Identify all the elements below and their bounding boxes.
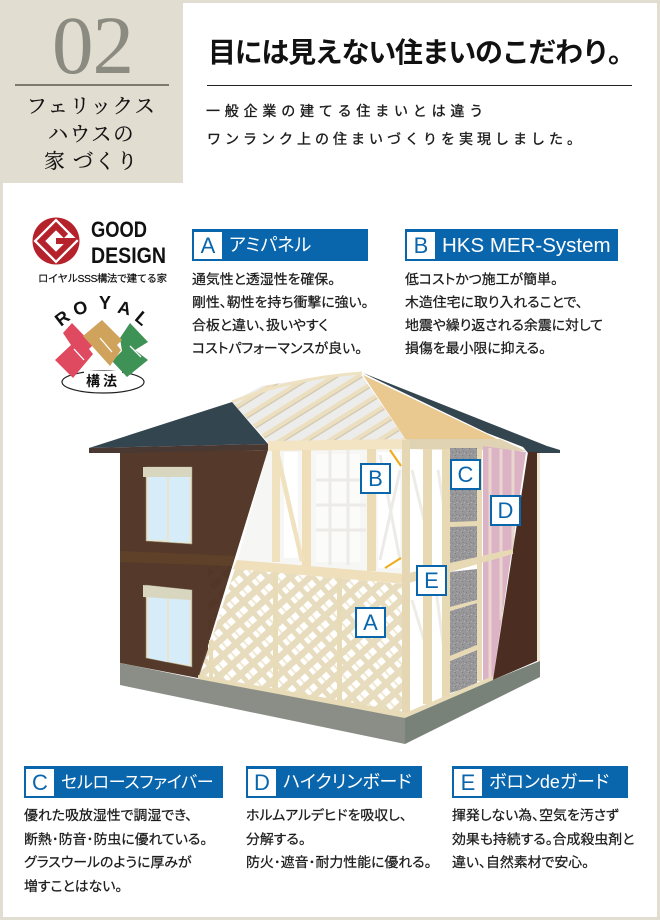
description D: 防火･遮音･耐力性能に優れる。 [246,854,432,870]
description C: 優れた吸放湿性で調湿でき、 [24,807,192,823]
icon: good design mark [32,218,80,264]
gray insulation [450,448,477,693]
interior ghost frame [237,449,450,715]
description D: 分解する。 [246,830,306,846]
label bar B: B [414,233,428,258]
right frame [405,449,513,704]
upper beam [268,439,406,451]
marker D: D [498,498,513,523]
description C: 断熱･防音･防虫に優れている。 [24,830,207,846]
royal arc letters [51,293,152,330]
upper window [143,467,192,544]
description D [246,807,432,870]
pink board [483,446,526,680]
royal arc letters: Y [99,293,111,313]
chart: house cutaway illustration [89,372,560,744]
marker A [355,607,386,638]
description E: 効果も持続する。合成殺虫剤と [452,830,634,846]
marker E [416,565,447,596]
label bar E: ボロンdeガード [489,772,609,792]
panel: D [246,766,432,870]
marker A: A [363,610,378,635]
royal oval [62,371,144,393]
caption: ロイヤルSSS構法で建てる家 [38,272,167,285]
right wall [493,452,540,680]
panel: A [192,229,369,356]
description A: 合板と違い、扱いやすく [192,317,328,333]
lower posts [198,440,493,718]
royal arc letters: A [116,297,133,319]
roof sheathing [363,375,500,441]
lattice panel [199,569,403,712]
label bar A: A [201,233,215,258]
description A: 通気性と透湿性を確保。 [192,271,335,287]
description E: 違い、自然素材で安心。 [452,854,589,870]
panel: section header block [0,0,183,183]
description B: 損傷を最小限に抑える。 [405,340,546,356]
section title: ハウスの [48,124,135,146]
marker B: B [368,466,383,491]
SSS emblem [55,320,148,378]
description C: グラスウールのように厚みが [24,854,192,870]
label bar C: C [32,770,48,795]
label bar A: アミパネル [229,235,311,255]
section title [27,96,156,173]
label bar D: D [254,770,270,795]
description E [452,807,634,870]
section number: 02 [52,0,133,91]
label bar B: HKS MER-System [442,234,611,257]
marker C: C [458,462,473,487]
description C: 増すことはない。 [24,878,122,894]
dark roof right [363,373,560,453]
description B: 低コストかつ施工が簡単。 [405,271,558,287]
description C [24,807,207,894]
panel: E [452,766,634,870]
royal arc letters: L [131,307,152,330]
intro line one: 一般企業の建てる住まいとは違う [206,103,488,119]
label bar A [192,229,368,261]
good design wordmark: DESIGN [91,243,166,268]
good design wordmark: GOOD [91,217,147,242]
label bar C [24,766,223,798]
description E: 揮発しない為、空気を汚さず [452,807,619,823]
left brown wall [120,450,268,678]
label bar D: ハイクリンボード [283,772,412,792]
mid beam [233,560,405,584]
marker C [450,459,481,490]
main heading: 目には見えない住まいのこだわり。 [208,37,635,68]
label bar E [452,766,628,798]
marker B [360,463,391,494]
divider line [15,84,169,86]
posts and diagonal brace [272,449,376,571]
orange braces [385,450,401,568]
royal arc letters: R [51,306,74,330]
section title: フェリックス [27,96,156,118]
intro line two: ワンランク上の住まいづくりを実現しました。 [207,131,585,147]
description D: ホルムアルデヒドを吸収し、 [246,807,407,823]
section title: 家 づくり [44,151,139,173]
description B: 木造住宅に取り入れることで、 [405,294,583,310]
label bar B [405,229,618,261]
marker E: E [424,568,439,593]
description B [405,271,603,356]
description A: コストパフォーマンスが良い。 [192,340,362,356]
description A [192,271,369,356]
royal arc letters: O [71,297,90,320]
label bar D [246,766,422,798]
description B: 地震や繰り返される余震に対して [405,317,603,333]
heading rule [207,85,632,86]
label bar C: セルロースファイバー [61,773,213,792]
panel: C [24,766,223,894]
marker D [490,495,521,526]
royal method label: 構法 [86,373,120,389]
logos: good design and royal SSS [32,217,167,394]
panel: B [405,229,618,356]
label bar E: E [461,770,475,795]
description A: 剛性、靭性を持ち衝撃に強い。 [192,294,369,310]
good design wordmark [91,217,166,268]
eave fascia left [89,444,268,453]
dark roof left [89,402,268,448]
lower window [143,585,192,667]
foundation [120,661,540,744]
rafters [232,373,406,442]
